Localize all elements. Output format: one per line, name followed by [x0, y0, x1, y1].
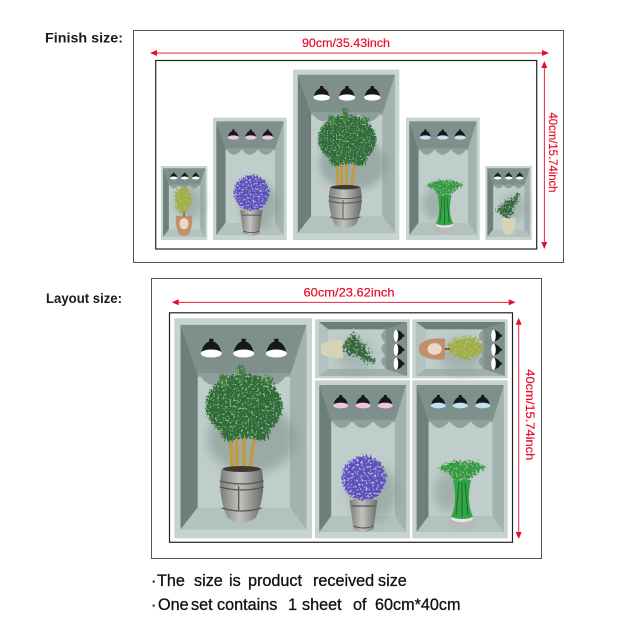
note: product size: is — [229, 572, 241, 590]
niche 1: small yellow plant — [161, 166, 207, 240]
niche 5: small fern — [485, 166, 532, 240]
panel: layout size frame — [152, 278, 542, 558]
layout niche C: yellow plant rotated — [412, 319, 508, 378]
dimension: layout height label: 40cm/15.74inch — [523, 369, 537, 460]
note: set contents: One — [158, 596, 189, 614]
note: product size: product — [248, 572, 302, 590]
panel: layout artwork border — [170, 313, 512, 542]
niche 3: bamboo — [293, 70, 399, 240]
note: set contents: set — [191, 596, 213, 614]
note: set contents: 1 — [288, 596, 297, 614]
dimension: layout width label: 60cm/23.62inch — [304, 286, 394, 300]
note: product size: size — [378, 572, 407, 590]
dimension: finish width label: 90cm/35.43inch — [302, 36, 390, 50]
panel: finish size frame — [134, 30, 564, 262]
dimension: layout width arrow — [172, 299, 516, 305]
heading: finish size: Finish size: — [45, 30, 123, 46]
dimension: finish height label: 40cm/15.74inch — [546, 112, 560, 192]
note: set contents: of — [353, 596, 367, 614]
note: product size: size — [194, 572, 223, 590]
niche 4: celery — [406, 118, 480, 240]
layout niche D: lavender — [315, 380, 410, 538]
note: product size: The — [157, 572, 185, 590]
note: set contents: contains — [217, 596, 277, 614]
panel: finish size artwork border — [156, 60, 537, 249]
niche 2: lavender — [213, 118, 287, 240]
layout niche A: bamboo — [174, 318, 312, 538]
layout niche E: celery — [412, 380, 508, 538]
note: set contents: sheet — [302, 596, 342, 614]
dimension: finish height arrow — [541, 61, 547, 249]
heading: layout size: Layout size: — [46, 291, 122, 306]
layout niche B: fern rotated — [315, 319, 410, 378]
note: product size: received — [313, 572, 374, 590]
dimension: layout height arrow — [516, 318, 522, 539]
note: set contents: · — [151, 596, 156, 614]
note: set contents: 60cm*40cm — [375, 596, 460, 614]
note: product size: · — [151, 572, 156, 590]
dimension: finish width arrow — [150, 50, 549, 56]
